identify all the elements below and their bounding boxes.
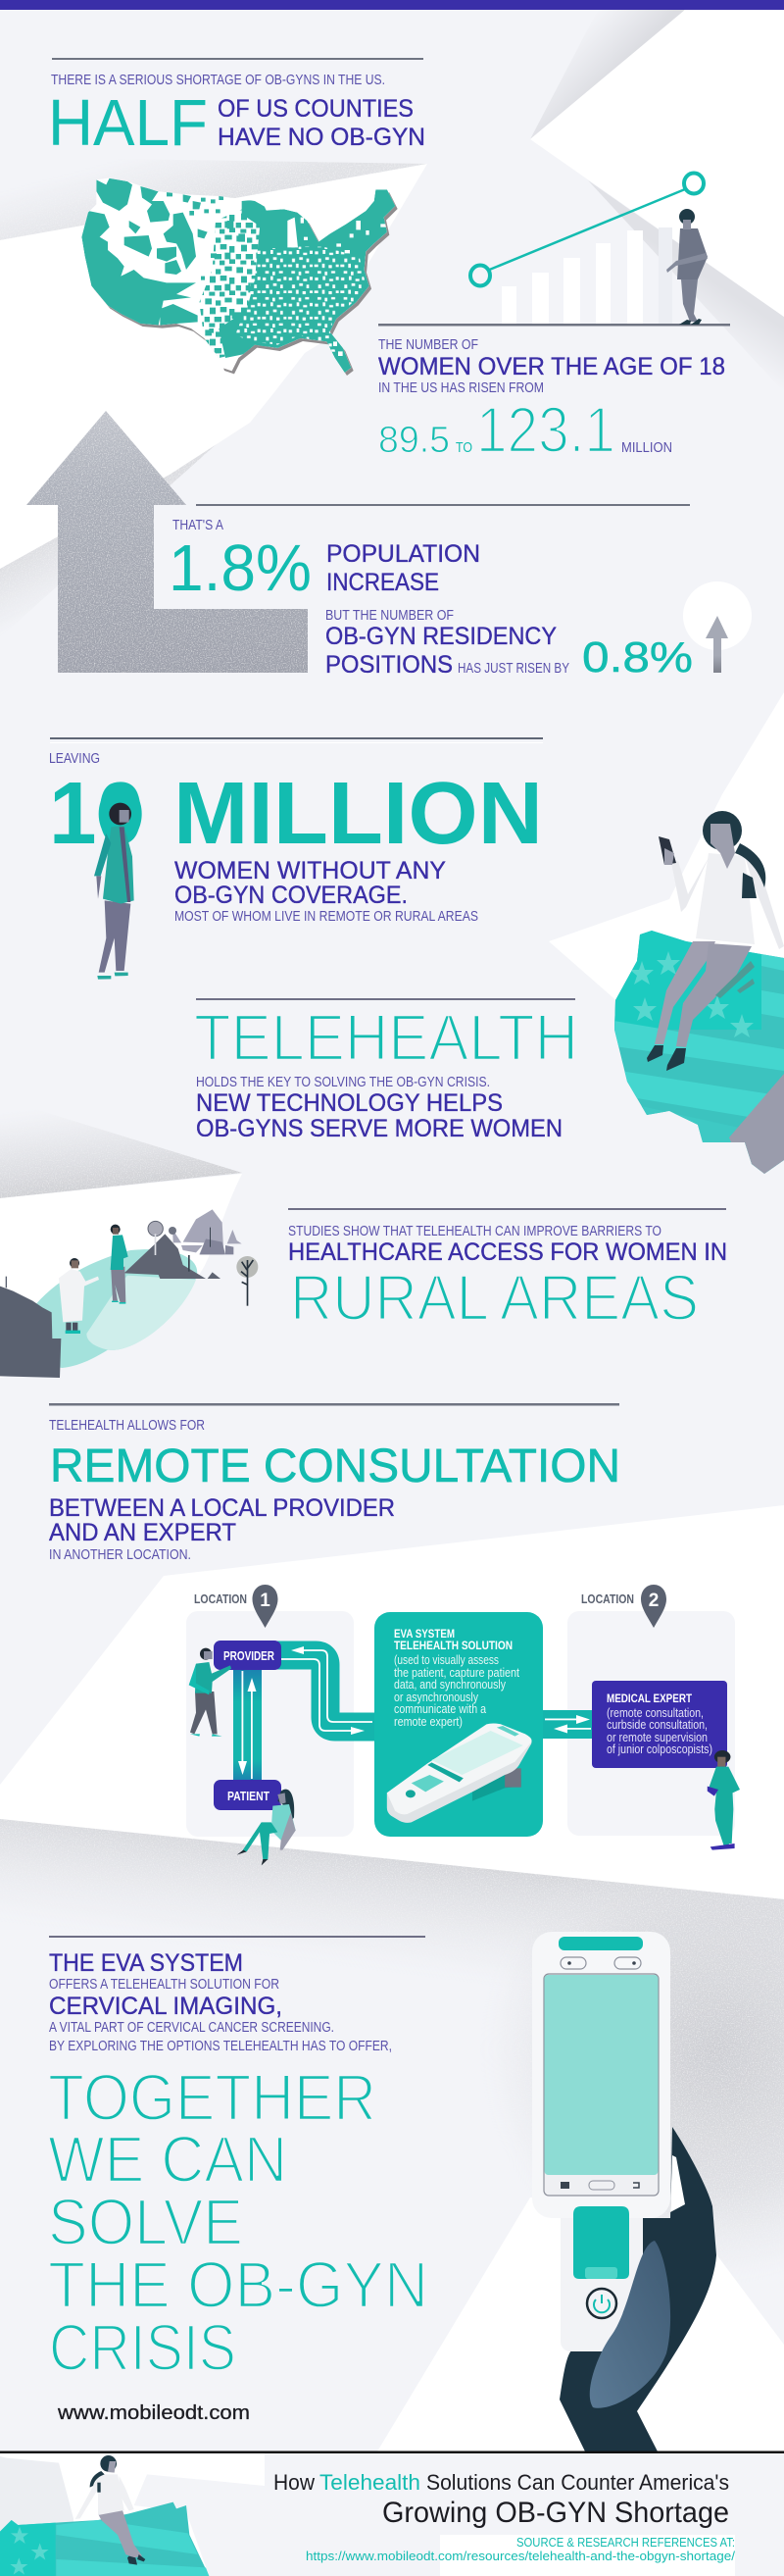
footer title: Growing OB-GYN Shortage xyxy=(382,2497,729,2529)
footer illustration xyxy=(0,2455,265,2576)
panel: EVA system: TELEHEALTH SOLUTION xyxy=(394,1639,513,1652)
footer xyxy=(0,2451,784,2576)
heading: remote consultation: REMOTE CONSULTATION xyxy=(50,1440,620,1492)
lower module xyxy=(561,2206,643,2351)
stat: 89.5 to 123.1 million: MILLION xyxy=(621,440,672,456)
top bar xyxy=(0,0,784,10)
power button xyxy=(587,2289,616,2318)
icon: pin 2: 2 xyxy=(649,1591,659,1611)
section: remote consultation: AND AN EXPERT xyxy=(49,1519,236,1546)
box: provider xyxy=(214,1641,281,1670)
section: telehealth: OB-GYNS SERVE MORE WOMEN xyxy=(196,1115,563,1142)
section: remote consultation: TELEHEALTH ALLOWS FOR xyxy=(49,1418,205,1434)
section: remote consultation: IN ANOTHER LOCATION. xyxy=(49,1547,191,1563)
section: rural areas xyxy=(288,1208,727,1334)
footer title: Telehealth xyxy=(319,2470,420,2495)
label: location 1: LOCATION xyxy=(194,1591,247,1606)
panel: EVA system: or asynchronously xyxy=(394,1691,479,1704)
section: telehealth xyxy=(194,998,578,1142)
section: EVA system: OFFERS A TELEHEALTH SOLUTION FOR xyxy=(49,1977,279,1993)
screen xyxy=(544,1974,659,2196)
source references xyxy=(306,2535,735,2563)
section: population increase: BUT THE NUMBER OF xyxy=(325,608,454,624)
box: patient xyxy=(214,1780,281,1810)
box: medical expert: curbside consultation, xyxy=(607,1718,708,1732)
stat: 89.5 to 123.1 million: TO xyxy=(456,439,472,456)
footer title xyxy=(273,2470,729,2529)
icon: standing woman xyxy=(666,209,708,325)
section: 10 million xyxy=(49,737,543,925)
section: EVA system xyxy=(49,1936,425,2054)
chart: rising bars with trend line xyxy=(378,173,730,326)
hills xyxy=(172,1209,242,1254)
buildings xyxy=(0,1287,61,1378)
footer title: Solutions Can Counter America's xyxy=(426,2470,729,2495)
heading: together we can solve the OB-GYN crisis: WE CAN xyxy=(48,2123,287,2197)
stat: 89.5 to 123.1 million xyxy=(378,393,672,466)
panel: EVA system: EVA SYSTEM xyxy=(394,1627,455,1641)
text: shortage intro: THERE IS A SERIOUS SHORTAGE OF OB-GYNS IN THE US. xyxy=(51,73,385,88)
text: website: www.mobileodt.com xyxy=(57,2402,250,2424)
panel: EVA system: data, and synchronously xyxy=(394,1678,507,1692)
stat: 1.8%: 1.8% xyxy=(169,531,312,605)
box: medical expert: (remote consultation, xyxy=(607,1706,704,1720)
stat: 89.5 to 123.1 million: 89.5 xyxy=(378,420,450,461)
source references: SOURCE & RESEARCH REFERENCES AT: xyxy=(516,2535,735,2550)
illustration: woman sitting on US flag map xyxy=(608,811,784,1177)
section: population increase xyxy=(169,504,752,682)
source references: https://www.mobileodt.com/resources/telehealth-and-the-obgyn-shortage/ xyxy=(306,2549,735,2563)
trees xyxy=(148,1221,258,1306)
heading: together we can solve the OB-GYN crisis: CRISIS xyxy=(49,2311,236,2385)
sitting woman xyxy=(647,811,784,1071)
box: medical expert: of junior colposcopists) xyxy=(607,1743,712,1756)
heading: together we can solve the OB-GYN crisis xyxy=(48,2061,428,2385)
panel: EVA system: communicate with a xyxy=(394,1702,486,1716)
section: EVA system: BY EXPLORING THE OPTIONS TELEHEALTH HAS TO OFFER, xyxy=(49,2039,392,2054)
panel: EVA system xyxy=(374,1612,543,1837)
section: 10 million: OB-GYN COVERAGE. xyxy=(174,882,408,909)
heading: telehealth: TELEHEALTH xyxy=(194,1001,578,1075)
flag map xyxy=(608,922,784,1177)
heading: together we can solve the OB-GYN crisis: SOLVE xyxy=(48,2186,243,2259)
icon: pin 1 xyxy=(253,1585,278,1628)
panel: location 1 xyxy=(186,1611,354,1837)
heading: rural areas: RURAL AREAS xyxy=(290,1261,699,1334)
box: provider: PROVIDER xyxy=(223,1648,274,1663)
icon: pin 1: 1 xyxy=(260,1591,270,1611)
section: population increase: HAS JUST RISEN BY xyxy=(458,661,569,677)
stat: 89.5 to 123.1 million: 123.1 xyxy=(476,393,615,466)
section: women over 18: THE NUMBER OF xyxy=(378,337,478,353)
section: women over 18 xyxy=(378,337,725,466)
section: remote consultation xyxy=(49,1403,620,1563)
section: EVA system: A VITAL PART OF CERVICAL CANCER SCREENING. xyxy=(49,2020,334,2036)
heading: together we can solve the OB-GYN crisis: TOGETHER xyxy=(48,2061,376,2135)
phone body xyxy=(532,1932,670,2218)
stat: 10: 10 xyxy=(49,765,144,863)
stat: 0.8%: 0.8% xyxy=(582,633,693,682)
heading: population increase: POPULATION xyxy=(326,540,480,568)
icon: small up arrow xyxy=(683,581,752,673)
box: medical expert: MEDICAL EXPERT xyxy=(607,1692,693,1705)
thumb xyxy=(590,2241,670,2408)
figure: patient xyxy=(237,1790,296,1865)
diagram: telehealth flow xyxy=(186,1585,740,1865)
section: women over 18: IN THE US HAS RISEN FROM xyxy=(378,380,544,396)
section: 10 million: MOST OF WHOM LIVE IN REMOTE OR RURAL AREAS xyxy=(174,909,478,925)
woman walking xyxy=(111,1225,128,1304)
connector: provider to EVA xyxy=(274,1646,382,1735)
heading: residency positions: OB-GYN RESIDENCY xyxy=(325,623,557,650)
section: population increase: POSITIONS xyxy=(325,651,453,679)
section: half of US counties xyxy=(48,58,425,160)
connector: provider and patient xyxy=(233,1667,262,1783)
heading: together we can solve the OB-GYN crisis: THE OB-GYN xyxy=(48,2248,428,2322)
figure: provider xyxy=(189,1648,231,1737)
heading: between provider and expert: BETWEEN A LOCAL PROVIDER xyxy=(49,1494,395,1522)
panel: EVA system: (used to visually assess xyxy=(394,1653,499,1667)
panel: EVA system: remote expert) xyxy=(394,1715,463,1729)
hand xyxy=(560,2127,716,2451)
path ellipse xyxy=(35,1249,197,1368)
icon: big up arrow xyxy=(26,411,308,673)
icon: EVA device xyxy=(387,1723,532,1823)
icon: standing woman with teal jacket xyxy=(94,784,142,980)
section: population increase: THAT'S A xyxy=(172,518,223,533)
section: 10 million: LEAVING xyxy=(49,751,100,767)
section: rural areas: STUDIES SHOW THAT TELEHEALTH CAN IMPROVE BARRIERS TO xyxy=(288,1224,662,1239)
label: location 2: LOCATION xyxy=(581,1591,634,1606)
box: medical expert xyxy=(592,1681,727,1768)
heading: of US counties: OF US COUNTIES xyxy=(218,95,414,123)
footer title: How xyxy=(273,2470,315,2495)
heading: women over the age of 18: WOMEN OVER THE AGE OF 18 xyxy=(378,353,725,380)
section: population increase: INCREASE xyxy=(326,569,439,596)
heading: HALF: HALF xyxy=(48,86,208,160)
doctor xyxy=(59,1258,99,1334)
stars xyxy=(630,951,754,1037)
panel: EVA system: the patient, capture patient xyxy=(394,1666,519,1680)
connector: EVA and expert xyxy=(543,1710,594,1739)
box: patient: PATIENT xyxy=(227,1789,270,1803)
heading: healthcare access: HEALTHCARE ACCESS FOR WOMEN IN xyxy=(288,1238,727,1266)
teal slot xyxy=(573,2206,629,2279)
figure: medical expert xyxy=(708,1750,740,1850)
map: US counties without OB-GYN xyxy=(78,172,407,382)
heading: have no OB-GYN: HAVE NO OB-GYN xyxy=(218,124,425,151)
heading: new technology: NEW TECHNOLOGY HELPS xyxy=(196,1089,503,1117)
panel: location 2 xyxy=(567,1611,735,1836)
section: EVA system: THE EVA SYSTEM xyxy=(49,1949,243,1977)
heading: women without coverage: WOMEN WITHOUT ANY xyxy=(174,857,446,884)
box: medical expert: or remote supervision xyxy=(607,1731,708,1744)
illustration: hand holding EVA device xyxy=(532,1932,716,2451)
section: telehealth: HOLDS THE KEY TO SOLVING THE OB-GYN CRISIS. xyxy=(196,1075,490,1090)
icon: pin 2 xyxy=(641,1585,666,1628)
section: EVA system: CERVICAL IMAGING, xyxy=(49,1993,282,2020)
illustration: rural scene xyxy=(0,1209,258,1378)
heading: million: MILLION xyxy=(173,765,543,863)
